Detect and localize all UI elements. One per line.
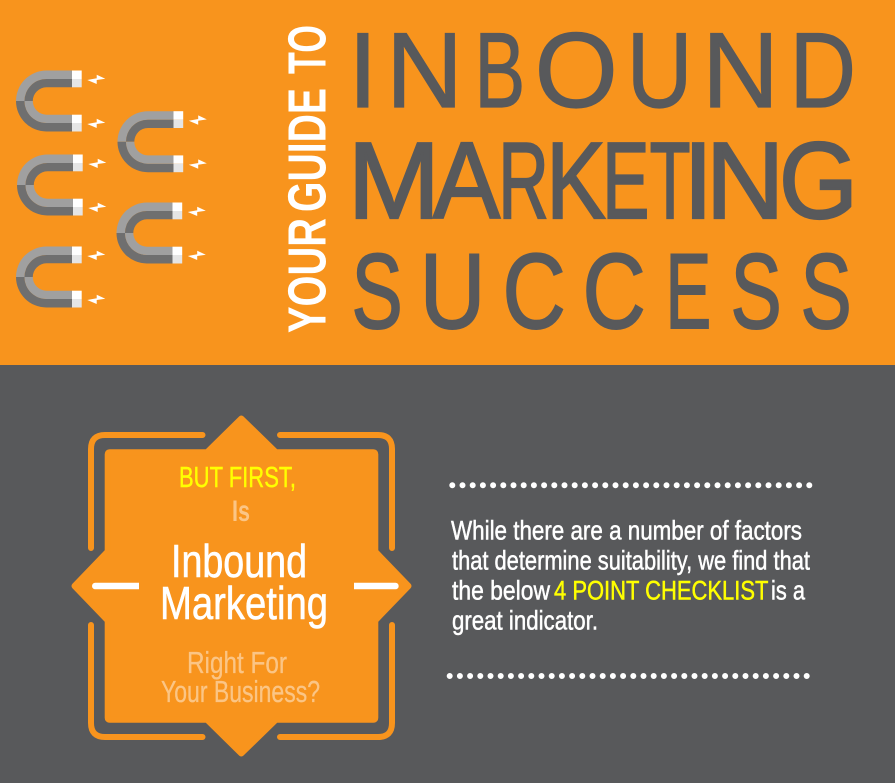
paragraph line 1: While there are a number of factors — [451, 515, 802, 545]
badge text: right for: Right For — [187, 645, 287, 680]
title line: marketing: T — [650, 120, 690, 242]
right white dash — [354, 583, 399, 589]
badge text: is: Is — [232, 495, 250, 528]
paragraph line 3 with highlighted checklist: is a — [771, 575, 806, 605]
vertical heading: your guide to: YOUR — [278, 218, 338, 333]
title line: marketing: K — [546, 120, 606, 242]
vertical heading: your guide to: GUIDE — [278, 88, 338, 212]
title line: inbound: N — [702, 10, 779, 130]
title line: success: S — [731, 231, 782, 351]
top dotted divider — [452, 482, 810, 488]
vertical heading: your guide to: TO — [278, 25, 338, 74]
title line: success: E — [666, 231, 711, 351]
intro paragraph — [451, 515, 810, 635]
paragraph line 2: that determine suitability, we find that — [452, 545, 810, 575]
orange header panel — [0, 0, 895, 365]
title line: marketing: I — [683, 120, 713, 242]
star shape — [74, 418, 408, 754]
title line: inbound: I — [348, 10, 378, 130]
panel: star badge — [74, 418, 408, 754]
magnet icons — [16, 70, 207, 308]
icon: magnet 5 — [116, 202, 206, 264]
title line: marketing: R — [498, 120, 549, 242]
badge text: your business: Your Business? — [161, 674, 320, 709]
icon: magnet 4 — [118, 111, 207, 172]
title line: inbound: O — [535, 10, 618, 130]
title line: success: C — [583, 231, 646, 351]
bottom dotted divider — [450, 673, 808, 679]
title line: inbound: U — [627, 10, 692, 130]
title line: success: C — [503, 231, 566, 351]
title line: success: S — [352, 231, 403, 351]
title line: marketing: M — [348, 120, 440, 242]
icon: magnet 3 — [16, 246, 105, 308]
title — [348, 10, 858, 351]
paragraph line 4: great indicator. — [452, 605, 598, 635]
corner brackets — [91, 435, 392, 737]
left white dash — [92, 583, 139, 589]
title line: success: S — [801, 231, 852, 351]
badge text: but first: BUT FIRST, — [179, 462, 296, 494]
title line: marketing: N — [706, 120, 784, 242]
title line: success: U — [420, 231, 485, 351]
badge text: inbound: Inbound — [171, 535, 307, 587]
title line: marketing: G — [779, 120, 858, 242]
title line: inbound: B — [474, 10, 525, 130]
paragraph line 3 with highlighted checklist: the below — [452, 575, 550, 605]
icon: magnet 2 — [17, 154, 106, 216]
title line: inbound: D — [790, 10, 856, 130]
badge text: marketing: Marketing — [160, 577, 328, 629]
icon: magnet 1 — [16, 70, 105, 132]
title line: marketing: A — [433, 120, 500, 242]
dark lower panel — [0, 365, 895, 783]
paragraph line 3 with highlighted checklist: 4 POINT CHECKLIST — [554, 575, 768, 605]
title line: inbound: N — [386, 10, 463, 130]
title line: marketing: E — [602, 120, 649, 242]
